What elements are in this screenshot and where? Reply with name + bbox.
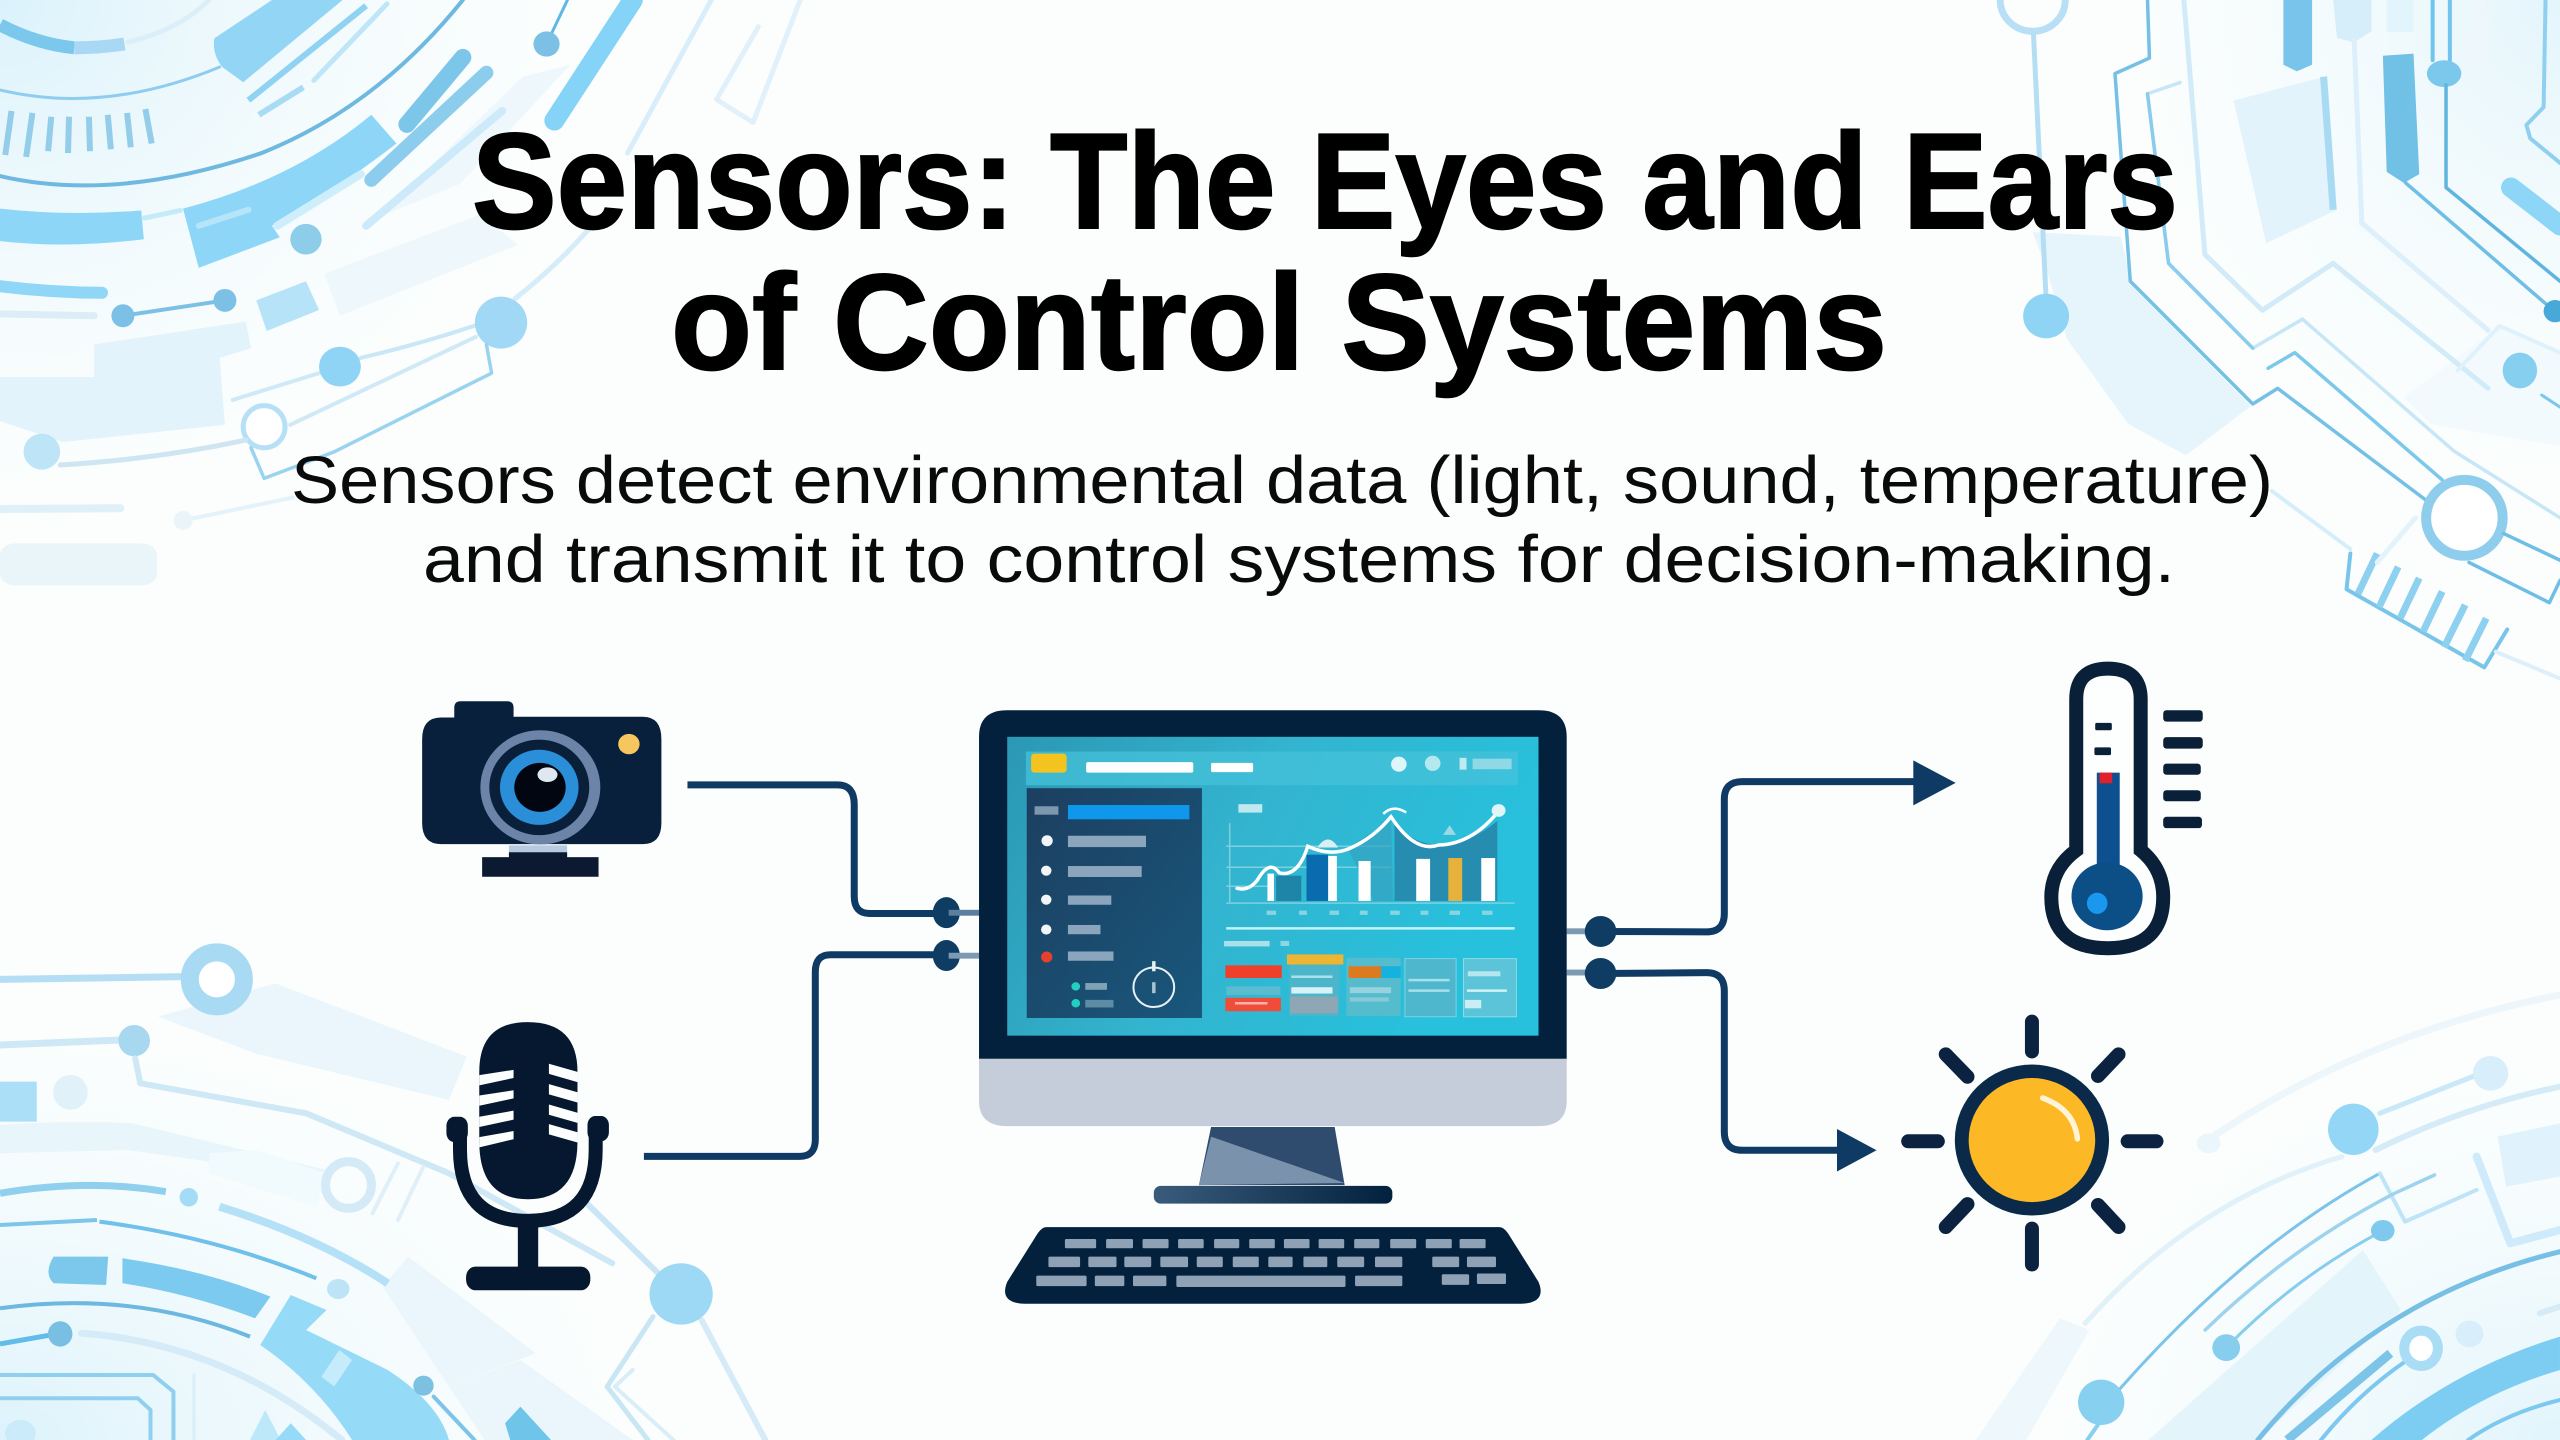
icon: microphone [446,1022,609,1290]
icon: thermometer [2051,669,2203,948]
icon: camera [422,701,661,877]
icon: computer monitor with dashboard [949,710,1593,1304]
title [472,105,2178,398]
arrow: camera wire to monitor [687,785,960,928]
decoration: top-right circuit traces [2000,0,2560,679]
arrow: monitor to sun [1585,958,1877,1171]
dashboard status cards [1224,941,1516,1017]
subtitle text block: Sensors detect environmental data (light, sound, temperature) [291,443,2273,518]
decoration: bottom-left circuit arcs [0,952,765,1440]
icon: sun [1908,1022,2156,1265]
decoration: top-left circuit arcs [0,0,800,586]
arrow: microphone wire to monitor [644,940,960,1156]
background wash: top-right [2000,0,2560,620]
background wash: bottom-right [1900,960,2560,1440]
monitor stand [1154,1127,1392,1204]
subtitle text block: and transmit it to control systems for decision-making. [423,522,2175,597]
background wash: top-left [0,0,700,620]
background wash: bottom-left [0,920,800,1440]
keyboard [1005,1227,1541,1304]
dashboard chart [1226,804,1515,928]
decoration: bottom-right circuit arcs [1976,995,2560,1440]
monitor connectors [949,910,1593,975]
title: Sensors: The Eyes and Ears [472,105,2178,257]
dashboard sidebar [1027,788,1202,1018]
title: of Control Systems [671,246,1887,398]
dashboard header [1026,752,1518,785]
arrow: monitor to thermometer [1585,760,1956,947]
subtitle text block [291,443,2273,597]
